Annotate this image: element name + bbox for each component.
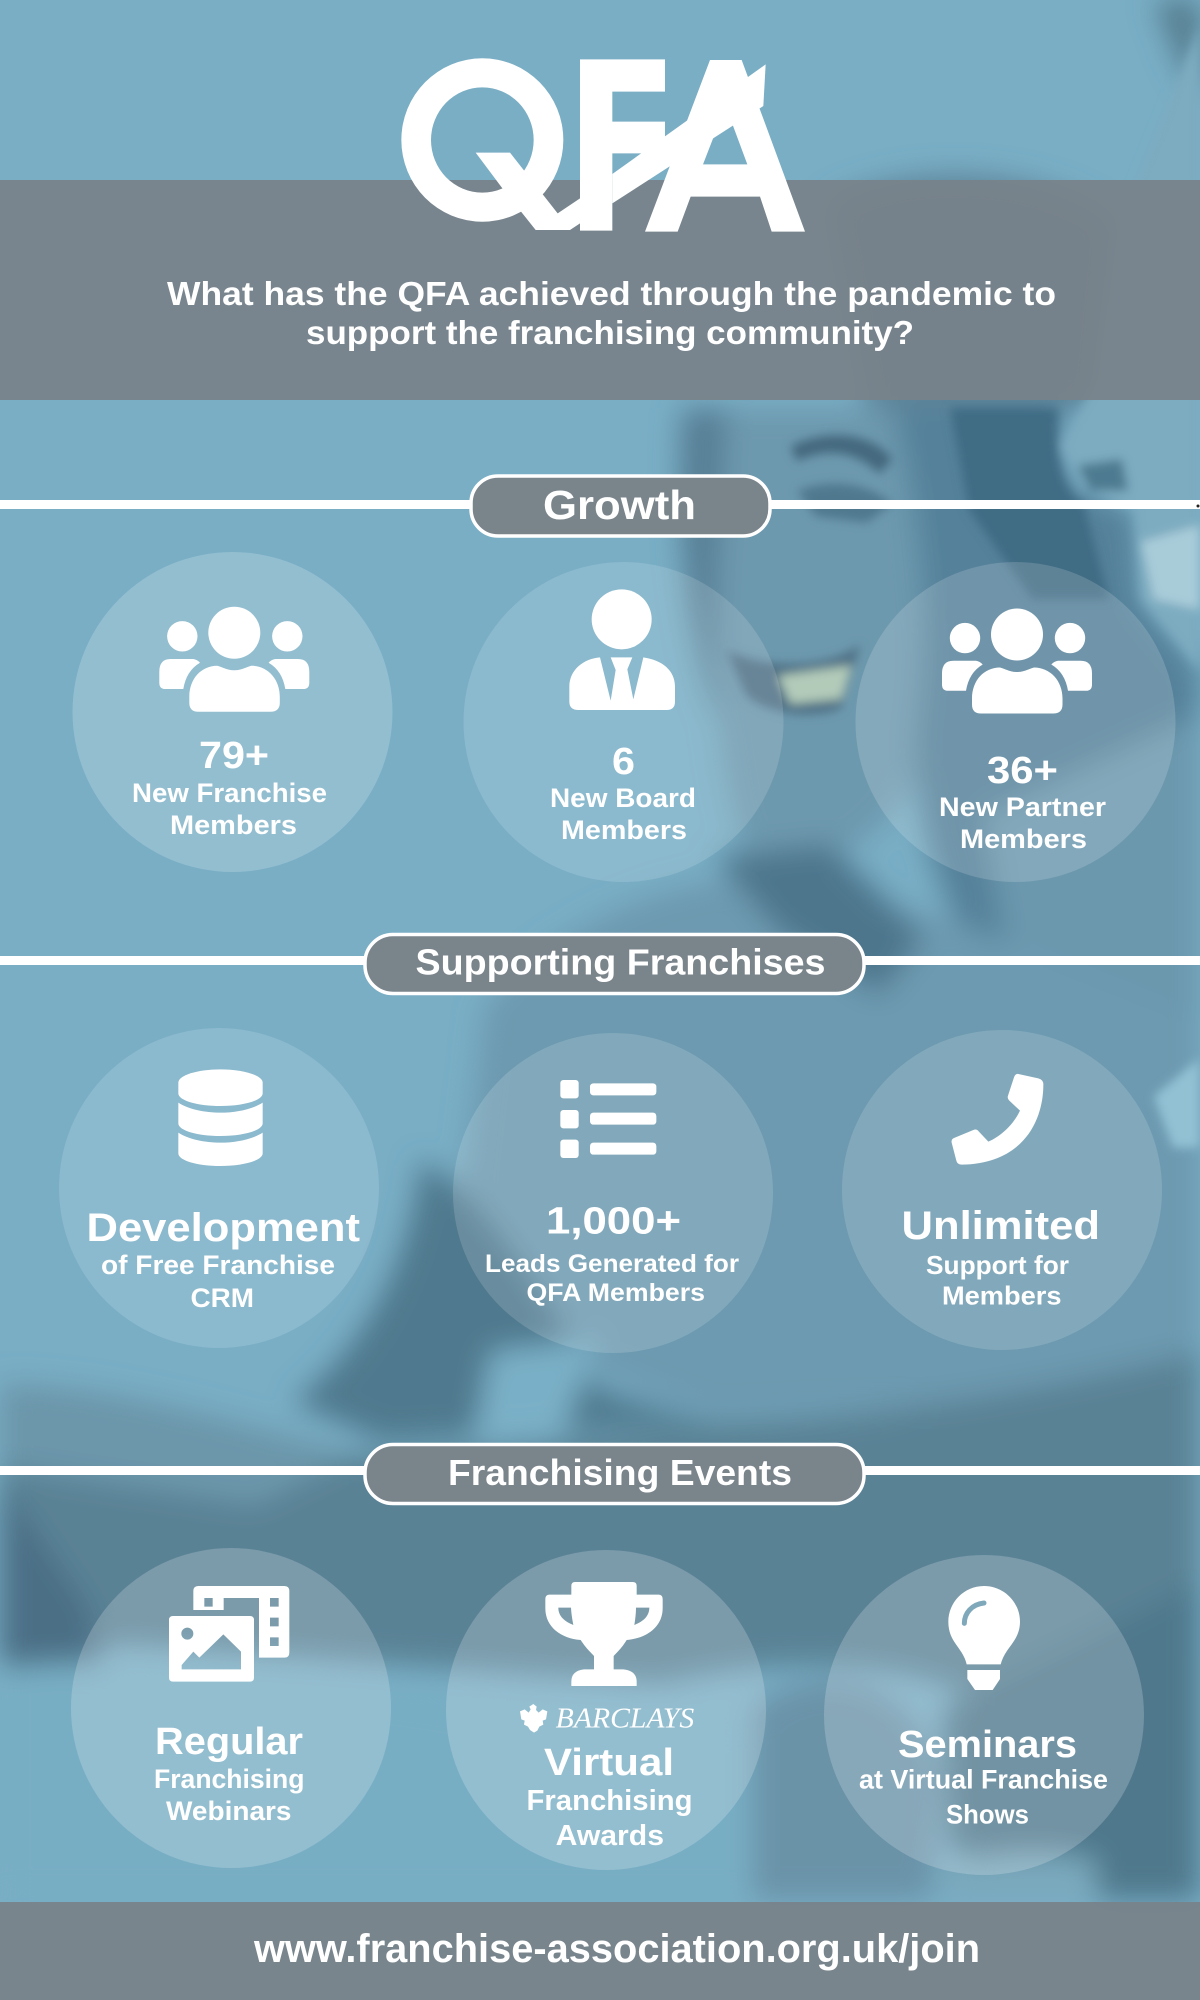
- title question: support the franchising community?: [306, 314, 914, 351]
- icon: person in suit: [569, 589, 675, 710]
- panel: new board members: Members: [561, 815, 687, 845]
- panel: new partner members: [856, 562, 1176, 882]
- panel: unlimited support: Members: [942, 1280, 1062, 1310]
- panel: leads generated: QFA Members: [526, 1279, 705, 1307]
- panel: regular webinars: [71, 1548, 391, 1868]
- panel: free franchise CRM: [59, 1028, 379, 1348]
- panel: new board members: [464, 562, 784, 882]
- icon: group of people: [159, 607, 309, 712]
- section divider: Franchising Events: [0, 1444, 1200, 1504]
- panel: free franchise CRM: Development: [86, 1206, 360, 1250]
- panel: unlimited support: Unlimited: [902, 1204, 1100, 1248]
- panel: seminars: Shows: [946, 1800, 1029, 1830]
- panel: virtual franchising awards: Virtual: [544, 1742, 674, 1784]
- footer band: [0, 1902, 1200, 2000]
- section divider: Growth: Growth: [543, 482, 696, 528]
- title question: What has the QFA achieved through the pandemic to: [167, 275, 1056, 312]
- panel: new board members: New Board: [550, 783, 696, 813]
- panel: new franchise members: 79+: [199, 735, 269, 777]
- panel: regular webinars: Regular: [155, 1721, 303, 1763]
- panel: leads generated: 1,000+: [546, 1200, 681, 1242]
- panel: new board members: 6: [612, 741, 635, 783]
- icon: trophy: [545, 1582, 663, 1686]
- panel: virtual franchising awards: [446, 1550, 766, 1870]
- panel: new partner members: Members: [960, 824, 1087, 854]
- panel: regular webinars: Webinars: [166, 1796, 292, 1826]
- panel: new partner members: New Partner: [939, 792, 1107, 822]
- panel: leads generated: [453, 1033, 773, 1353]
- icon: database: [178, 1069, 263, 1166]
- title question: [167, 275, 1056, 351]
- panel: regular webinars: Franchising: [154, 1764, 304, 1794]
- icon: phone: [952, 1074, 1043, 1165]
- top header band: [0, 180, 1200, 400]
- panel: free franchise CRM: CRM: [190, 1283, 254, 1313]
- panel: leads generated: Leads Generated for: [485, 1250, 739, 1278]
- section divider: Supporting Franchises: Supporting Franchises: [416, 942, 826, 982]
- icon: film and picture: [169, 1586, 289, 1682]
- panel: virtual franchising awards: Franchising: [526, 1785, 692, 1817]
- panel: new partner members: 36+: [987, 750, 1058, 792]
- logo: QFA: [401, 58, 805, 232]
- panel: unlimited support: Support for: [926, 1250, 1069, 1280]
- panel: virtual franchising awards: Awards: [556, 1820, 664, 1852]
- section divider: Supporting Franchises: [0, 934, 1200, 994]
- panel: virtual franchising awards: BARCLAYS: [556, 1702, 695, 1734]
- icon: Barclays eagle logo: [520, 1704, 547, 1733]
- icon: group of people: [942, 608, 1092, 714]
- icon: light bulb: [948, 1586, 1020, 1690]
- section divider: Franchising Events: Franchising Events: [448, 1452, 792, 1493]
- panel: new franchise members: New Franchise: [132, 778, 327, 808]
- panel: unlimited support: [842, 1030, 1162, 1350]
- panel: free franchise CRM: of Free Franchise: [101, 1250, 335, 1280]
- panel: seminars: at Virtual Franchise: [859, 1764, 1108, 1794]
- icon: list: [560, 1080, 656, 1158]
- panel: seminars: Seminars: [898, 1724, 1077, 1766]
- panel: seminars: [824, 1555, 1144, 1875]
- panel: new franchise members: Members: [170, 810, 297, 840]
- footer website URL: www.franchise-association.org.uk/join: [253, 1927, 980, 1971]
- section divider: Growth: [0, 476, 1200, 536]
- panel: new franchise members: [72, 552, 392, 872]
